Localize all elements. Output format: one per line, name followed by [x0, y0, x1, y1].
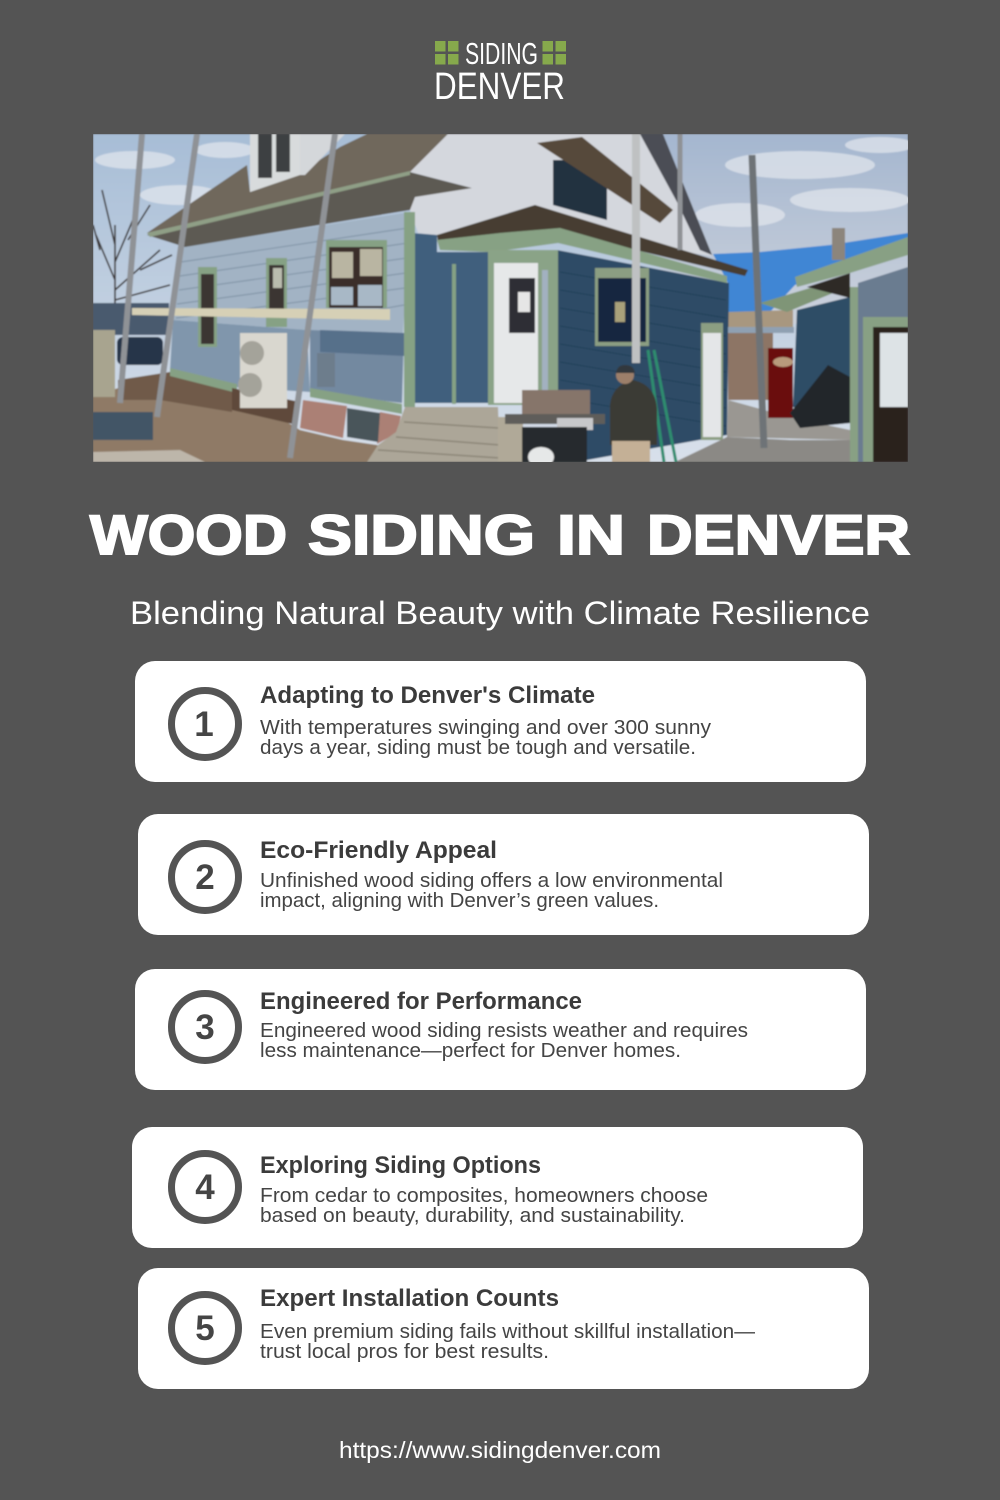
icon: number 2	[172, 844, 238, 910]
icon: left green window	[435, 41, 458, 64]
panel: step 2	[138, 814, 869, 935]
panel: step 5	[138, 1268, 869, 1389]
text: step 4 body	[260, 1184, 708, 1227]
text: step 2 body	[260, 869, 723, 912]
photo: house with siding under installation	[93, 134, 915, 467]
icon: number 5	[172, 1294, 238, 1362]
text: step 3 body	[260, 1019, 748, 1062]
text: step 5 body	[260, 1320, 755, 1363]
title: WOOD	[90, 503, 287, 566]
icon: right green window	[542, 41, 566, 64]
text: step 2 body: Unfinished wood siding offers a low environmental	[260, 869, 723, 892]
heading: step 3: Engineered for Performance	[260, 988, 582, 1015]
text: step 5 body: trust local pros for best results.	[260, 1340, 549, 1363]
text: step 3 body: less maintenance—perfect for Denver homes.	[260, 1039, 681, 1062]
text: step 4 body: based on beauty, durability, and sustainability.	[260, 1204, 685, 1227]
text: step 1 body	[260, 716, 712, 759]
text: step 1 body: With temperatures swinging and over 300 sunny	[260, 716, 712, 739]
logo: Siding Denver	[434, 36, 566, 108]
icon: number 2: 2	[195, 858, 215, 897]
logo word: siding: SIDING	[465, 36, 538, 71]
title	[90, 503, 910, 566]
icon: number 5: 5	[195, 1309, 215, 1348]
subtitle: Blending Natural Beauty with Climate Resilience	[130, 595, 870, 631]
icon: number 1	[172, 690, 238, 758]
icon: number 1: 1	[194, 705, 214, 744]
heading: step 4: Exploring Siding Options	[260, 1152, 541, 1179]
text: step 5 body: Even premium siding fails without skillful installation—	[260, 1320, 755, 1343]
icon: number 4	[172, 1154, 238, 1220]
panel: step 1	[135, 661, 866, 782]
heading: step 1: Adapting to Denver's Climate	[260, 682, 595, 709]
title: DENVER	[647, 503, 910, 566]
logo word: denver: DENVER	[434, 66, 565, 108]
title: SIDING	[308, 503, 535, 566]
heading: step 5: Expert Installation Counts	[260, 1285, 559, 1312]
text: step 4 body: From cedar to composites, homeowners choose	[260, 1184, 708, 1207]
panel: step 4	[132, 1127, 863, 1248]
text: step 1 body: days a year, siding must be tough and versatile.	[260, 736, 696, 759]
website url: https://www.sidingdenver.com	[339, 1437, 661, 1463]
text: step 3 body: Engineered wood siding resists weather and requires	[260, 1019, 748, 1042]
heading: step 2: Eco-Friendly Appeal	[260, 837, 497, 864]
icon: number 4: 4	[195, 1168, 215, 1207]
panel: step 3	[135, 969, 866, 1090]
title: IN	[557, 503, 625, 566]
icon: number 3: 3	[195, 1008, 215, 1047]
text: step 2 body: impact, aligning with Denver’s green values.	[260, 889, 659, 912]
icon: number 3	[172, 994, 238, 1060]
